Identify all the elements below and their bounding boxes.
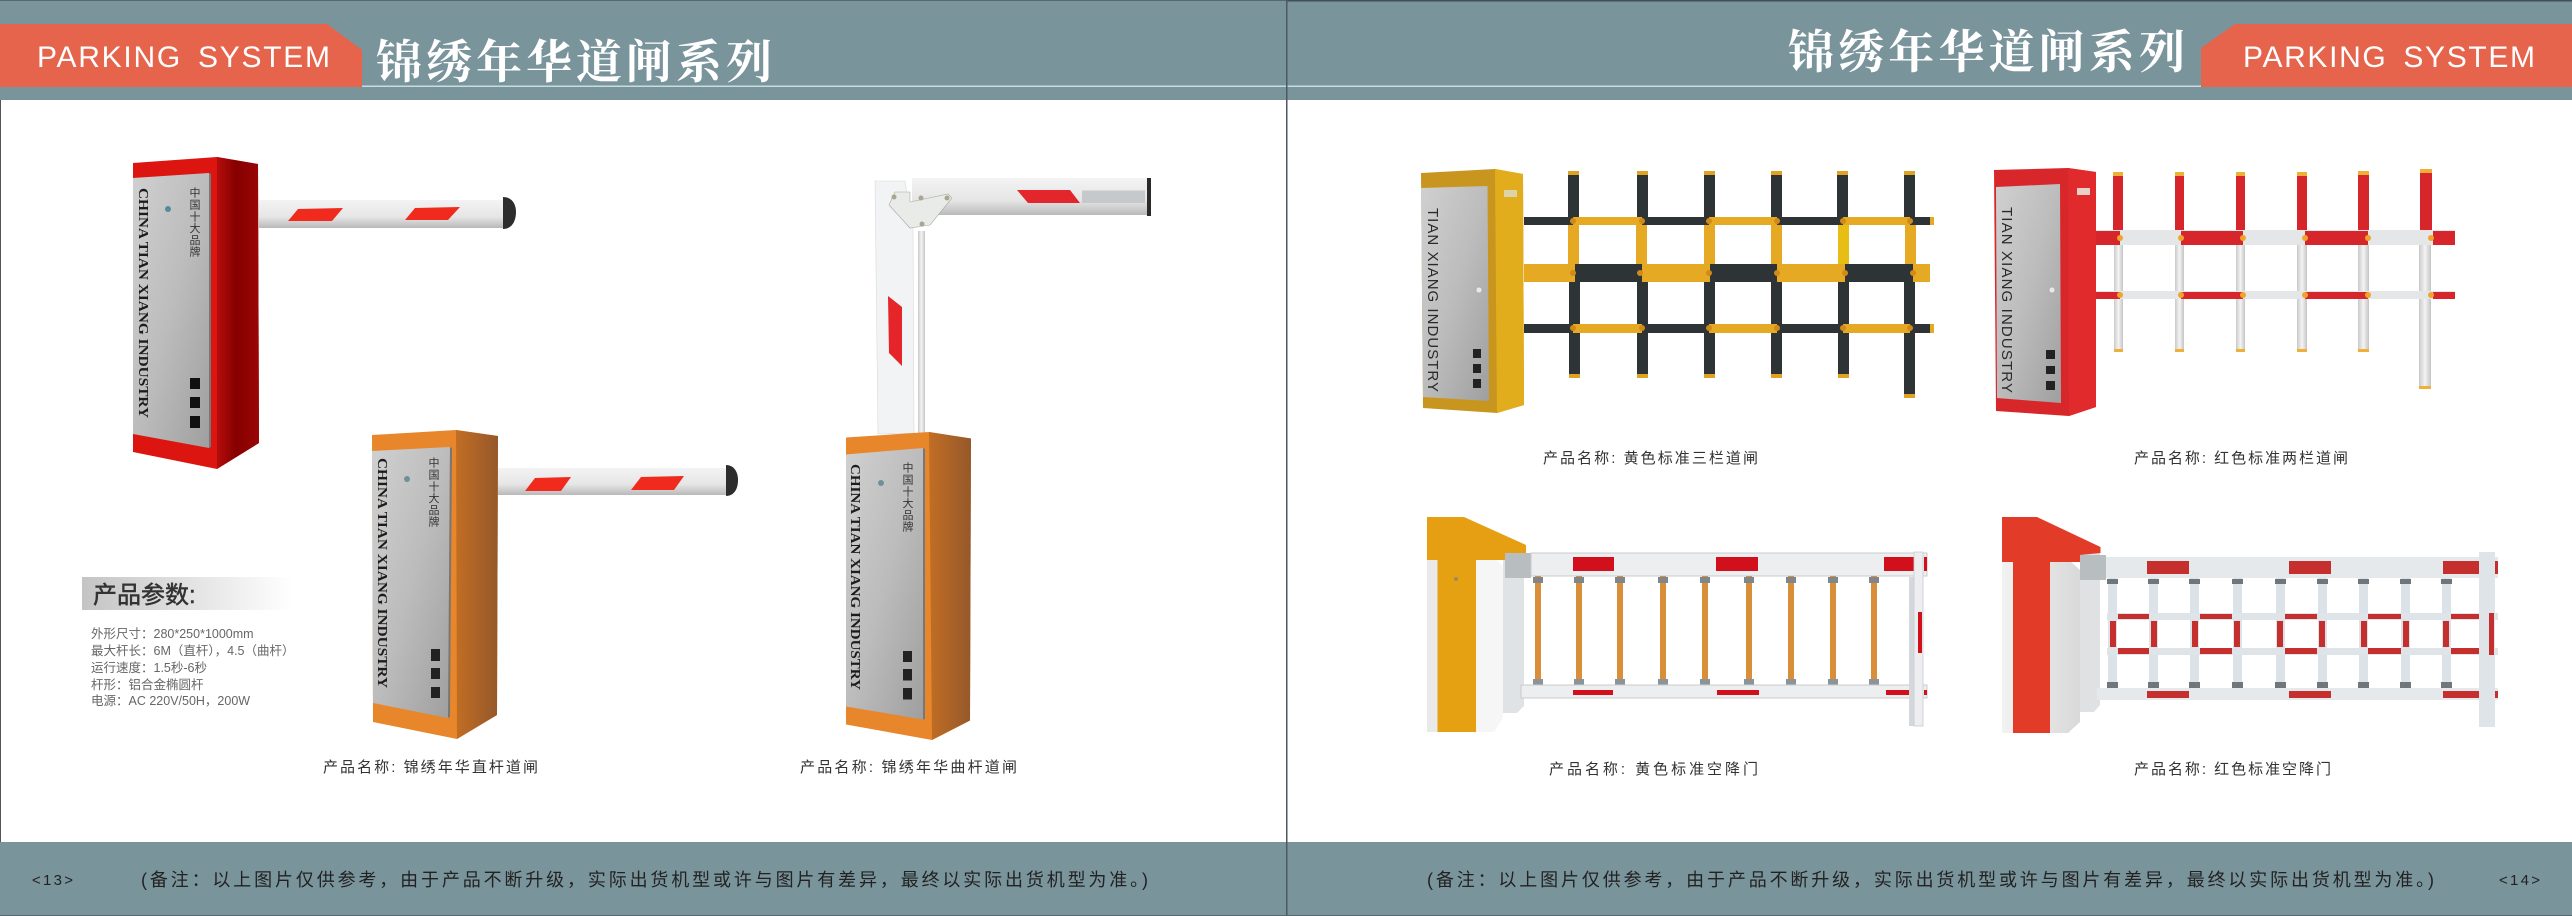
barrier: yellow three-rail: TIAN XIANG INDUSTRY xyxy=(1424,208,1441,392)
parameters list: 运行速度：1.5秒-6秒 xyxy=(91,660,207,675)
parameters heading xyxy=(82,577,292,610)
caption: yellow air-gate: 产品名称: 黄色标准空降门 xyxy=(1549,761,1758,778)
header band: right page xyxy=(1286,0,2572,100)
barrier: yellow air-gate xyxy=(1427,517,1927,732)
page number 14: <14> xyxy=(2499,872,2540,889)
parameters list xyxy=(91,627,294,708)
barrier: orange straight arm xyxy=(372,430,738,739)
parameters list: 外形尺寸：280*250*1000mm xyxy=(91,627,254,641)
caption: folding arm: 产品名称: 锦绣年华曲杆道闸 xyxy=(800,759,1017,776)
parameters list: 电源：AC 220V/50H，200W xyxy=(91,694,250,708)
barrier: orange straight arm: 中国十大品牌 xyxy=(426,457,442,528)
barrier: yellow three-rail xyxy=(1421,169,1934,413)
footer band: right page xyxy=(1286,842,2572,916)
page number 13: <13> xyxy=(32,872,73,889)
caption: red two-rail: 产品名称: 红色标准两栏道闸 xyxy=(2134,450,2348,467)
panel: product parameters xyxy=(82,577,294,708)
series title: right: 锦绣年华道闸系列 xyxy=(1788,16,2185,82)
header band: left page xyxy=(0,0,1286,100)
barrier: red two-rail xyxy=(1994,168,2455,416)
parameters list: 最大杆长：6M（直杆），4.5（曲杆） xyxy=(91,644,294,658)
barrier: orange folding arm: 中国十大品牌 xyxy=(900,462,916,533)
barrier: orange straight arm: CHINA TIAN XIANG INDUSTRY xyxy=(374,458,389,688)
banner label: right: PARKING SYSTEM xyxy=(2243,41,2535,74)
caption: straight arm: 产品名称: 锦绣年华直杆道闸 xyxy=(323,759,538,776)
series title: left: 锦绣年华道闸系列 xyxy=(376,26,772,92)
banner label: left: PARKING SYSTEM xyxy=(37,41,330,74)
disclaimer note: left: (备注：以上图片仅供参考，由于产品不断升级，实际出货机型或许与图片有差异，最终以实际出货机型为准。) xyxy=(141,870,1148,890)
barrier: red air-gate xyxy=(2002,517,2498,733)
footer band: left page xyxy=(0,842,1286,916)
orange banner: right xyxy=(2201,24,2572,87)
barrier: orange folding arm xyxy=(846,178,1151,740)
orange banner: left xyxy=(0,24,362,87)
barrier: red two-rail: TIAN XIANG INDUSTRY xyxy=(1998,207,2015,393)
parameters heading: 产品参数: xyxy=(93,582,196,609)
caption: yellow three-rail: 产品名称: 黄色标准三栏道闸 xyxy=(1543,450,1758,467)
barrier: red straight arm xyxy=(133,157,516,469)
parameters list: 杆形：铝合金椭圆杆 xyxy=(91,677,204,692)
disclaimer note: right: (备注：以上图片仅供参考，由于产品不断升级，实际出货机型或许与图片有差异，最终以实际出货机型为准。) xyxy=(1427,870,2434,890)
barrier: orange folding arm: CHINA TIAN XIANG INDUSTRY xyxy=(847,464,862,690)
barrier: red straight arm: CHINA TIAN XIANG INDUSTRY xyxy=(135,188,150,418)
barrier: red straight arm: 中国十大品牌 xyxy=(187,187,203,258)
caption: red air-gate: 产品名称: 红色标准空降门 xyxy=(2134,761,2331,778)
